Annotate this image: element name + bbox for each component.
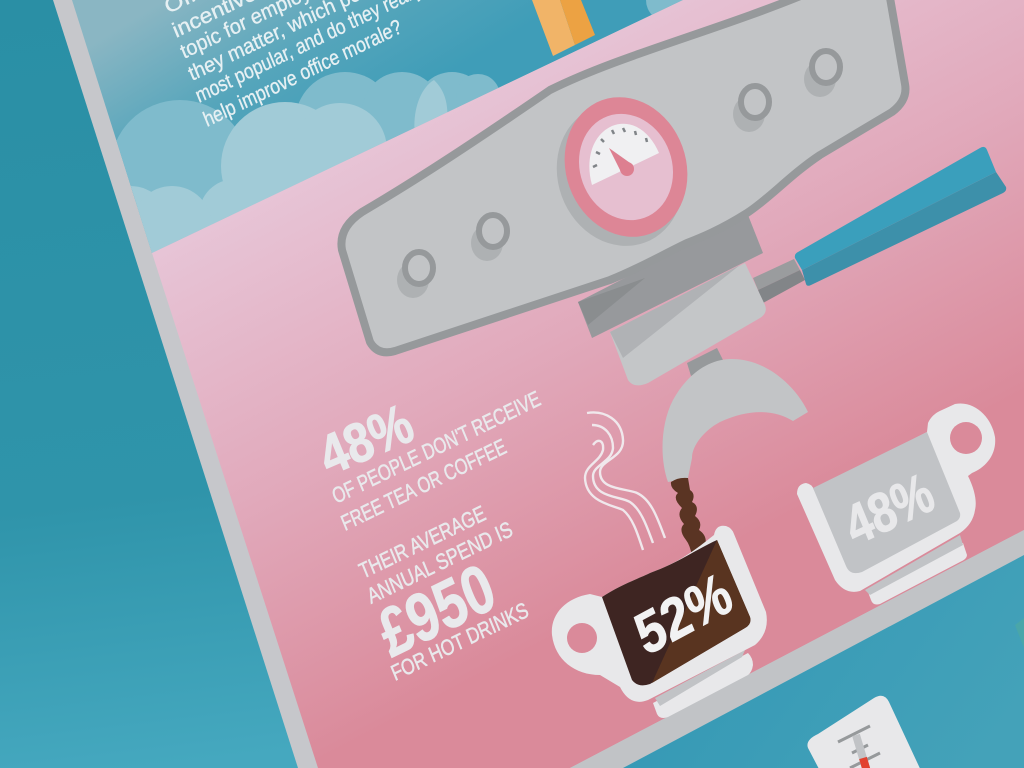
portafilter stem <box>687 348 723 376</box>
machine buttons <box>397 51 840 298</box>
steam lines <box>585 412 665 550</box>
back clouds <box>116 0 682 226</box>
espresso machine <box>341 0 1006 482</box>
statistics text <box>310 386 544 686</box>
portafilter handle <box>795 147 1006 286</box>
spend lead-in: ANNUAL SPEND IS <box>363 516 516 609</box>
handle hole <box>950 422 982 454</box>
stat 48% description: FREE TEA OR COFFEE <box>337 434 510 536</box>
stat 48% description: OF PEOPLE DON'T RECEIVE <box>328 386 544 509</box>
cup body and handle <box>552 526 767 702</box>
gauge ticks <box>593 128 647 167</box>
brown coffee cup 52% <box>552 526 767 718</box>
shelf <box>570 530 1024 768</box>
spend lead-in: THEIR AVERAGE <box>355 500 489 584</box>
saucer <box>653 653 753 718</box>
saucer <box>868 543 967 604</box>
thermometer card <box>807 696 930 768</box>
handle connector <box>753 259 805 303</box>
intro text: help improve office morale? <box>200 15 405 132</box>
neck <box>578 215 763 338</box>
cup label 52%: 52% <box>627 561 741 668</box>
portafilter spout arch <box>663 359 808 482</box>
saucer shadow line <box>655 650 745 706</box>
spend suffix: FOR HOT DRINKS <box>387 597 532 686</box>
stat £950: £950 <box>368 550 506 672</box>
pressure gauge <box>537 80 707 264</box>
empty cup interior <box>813 432 960 573</box>
front clouds <box>131 80 448 253</box>
cup label 48%: 48% <box>836 461 942 557</box>
teal partial icon at right edge <box>1015 618 1024 648</box>
coffee lighter <box>652 540 750 683</box>
cup body and handle <box>797 403 995 592</box>
handle hole <box>567 623 597 653</box>
stat 48%: 48% <box>310 392 422 487</box>
coffee dark <box>602 540 750 685</box>
group head shade <box>610 265 740 358</box>
machine body <box>341 0 905 352</box>
neck shade <box>578 278 645 325</box>
coffee stream <box>671 478 706 556</box>
gauge dial <box>589 124 659 185</box>
gauge needle <box>609 148 634 176</box>
group head <box>610 263 766 385</box>
panel: teal lower section <box>623 555 1024 768</box>
panel: intro blue <box>72 0 690 270</box>
grey empty cup 48% <box>797 403 995 604</box>
saucer shadow line <box>865 535 963 595</box>
thermometer <box>838 726 880 768</box>
orange pencil illustration <box>532 0 595 56</box>
